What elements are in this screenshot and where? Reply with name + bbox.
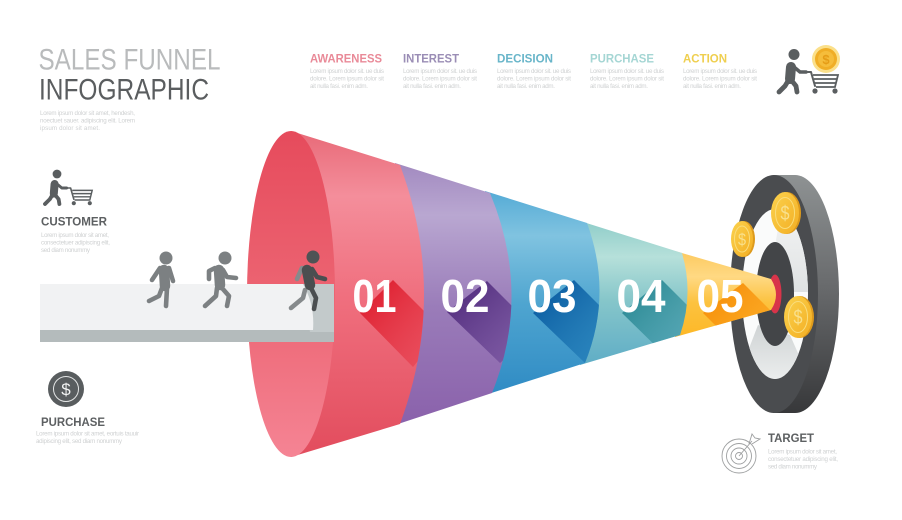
segment 03: 03 [528,270,576,322]
intro text [40,110,135,132]
segment 02 [395,163,512,424]
segment 01: 01 [352,270,396,322]
legend: awareness: AWARENESS [310,54,382,66]
purchase label: PURCHASE [41,417,105,429]
segment 05 [675,251,776,337]
coins [731,192,814,338]
target block [722,433,838,473]
purchase text: adipiscing elit, sed diam nonummy [36,438,123,445]
icon: shopper with cart and coin [779,45,840,94]
coin: lower: $ [794,307,802,329]
legend: purchase: PURCHASE [590,54,654,66]
target red centre [768,274,782,314]
segment 04: 04 [616,270,666,322]
legend: decision: DECISION [497,54,553,66]
purchase text: Lorem ipsum dolor sit amet, eortuis tauuir [36,430,139,438]
customer label: CUSTOMER [41,216,108,228]
legend: purchase: Lorem ipsum dolor sit. ue duis [590,68,664,75]
walker 1 [149,252,173,306]
purchase text [36,430,139,445]
legend: decision [497,54,571,90]
funnel mouth [247,131,335,457]
customer text: consectetuer adipiscing elit, [41,240,110,246]
legend: awareness: ait nulla fasi. enim adm. [310,83,368,90]
legend: decision: Lorem ipsum dolor sit. ue duis [497,68,571,75]
customer block [41,170,110,254]
target text: sed diam nonummy [768,464,818,470]
target face ring [730,175,818,413]
legend: awareness: Lorem ipsum dolor sit. ue duis [310,68,384,75]
funnel [247,131,783,457]
segment 02: 02 [440,270,490,322]
legend: purchase: dolore. Lorem ipsum dolor sit [590,76,664,82]
legend: action: ait nulla fasi. enim adm. [683,83,741,90]
coin: top [771,192,801,234]
purchase block [36,371,139,445]
coin: left: $ [738,230,746,249]
legend: awareness: dolore. Lorem ipsum dolor sit [310,76,384,82]
legend: purchase: ait nulla fasi. enim adm. [590,83,648,90]
segment 04 [580,221,688,365]
legend: interest: dolore. Lorem ipsum dolor sit [403,76,477,82]
legend: interest [403,54,477,90]
legend: awareness [310,54,384,90]
title: SALES FUNNEL [38,44,220,76]
legend: interest: INTEREST [403,54,459,66]
target side [773,175,839,413]
legend: action: ACTION [683,54,727,66]
customer text [41,232,110,254]
target text: Lorem ipsum dolor sit amet, [768,448,837,456]
target bullseye [756,242,794,346]
target label: TARGET [768,433,814,445]
coin: left [731,221,755,257]
segment 01 [292,131,424,457]
icon: shopper with cart and coin: $ [822,52,830,67]
icon: customer with cart [45,170,92,205]
customer text: sed diam nonummy [41,247,91,254]
platform [40,284,334,342]
legend: decision: dolore. Lorem ipsum dolor sit [497,76,571,82]
legend: interest: ait nulla fasi. enim adm. [403,83,461,90]
intro text: noectuet sauer. adipiscing elit. Lorem [40,118,135,124]
title: INFOGRAPHIC [39,74,209,106]
legend: purchase [590,54,664,90]
legend: decision: ait nulla fasi. enim adm. [497,83,555,90]
target text: consectetuer adipiscing elit, [768,456,838,463]
title [38,44,220,106]
intro text: Lorem ipsum dolor sit amet, hendesh, [40,110,135,117]
legend: action [683,54,757,90]
customer text: Lorem ipsum dolor sit amet, [41,232,109,239]
target board [730,175,839,413]
target text [768,448,838,470]
intro text: ipsum dolor sit amet. [40,125,100,132]
icon: outline target [722,434,760,473]
coin: top: $ [780,203,790,225]
walker 2 [205,252,236,306]
segment 05: 05 [696,270,744,322]
legend: interest: Lorem ipsum dolor sit. ue duis [403,68,477,75]
legend: action: dolore. Lorem ipsum dolor sit [683,76,757,82]
segment 03 [485,191,600,394]
coin: lower [784,296,814,338]
legend: action: Lorem ipsum dolor sit. ue duis [683,68,757,75]
target white ring [743,210,808,379]
walker 3 [291,250,325,309]
icon: dollar badge: $ [61,380,71,399]
